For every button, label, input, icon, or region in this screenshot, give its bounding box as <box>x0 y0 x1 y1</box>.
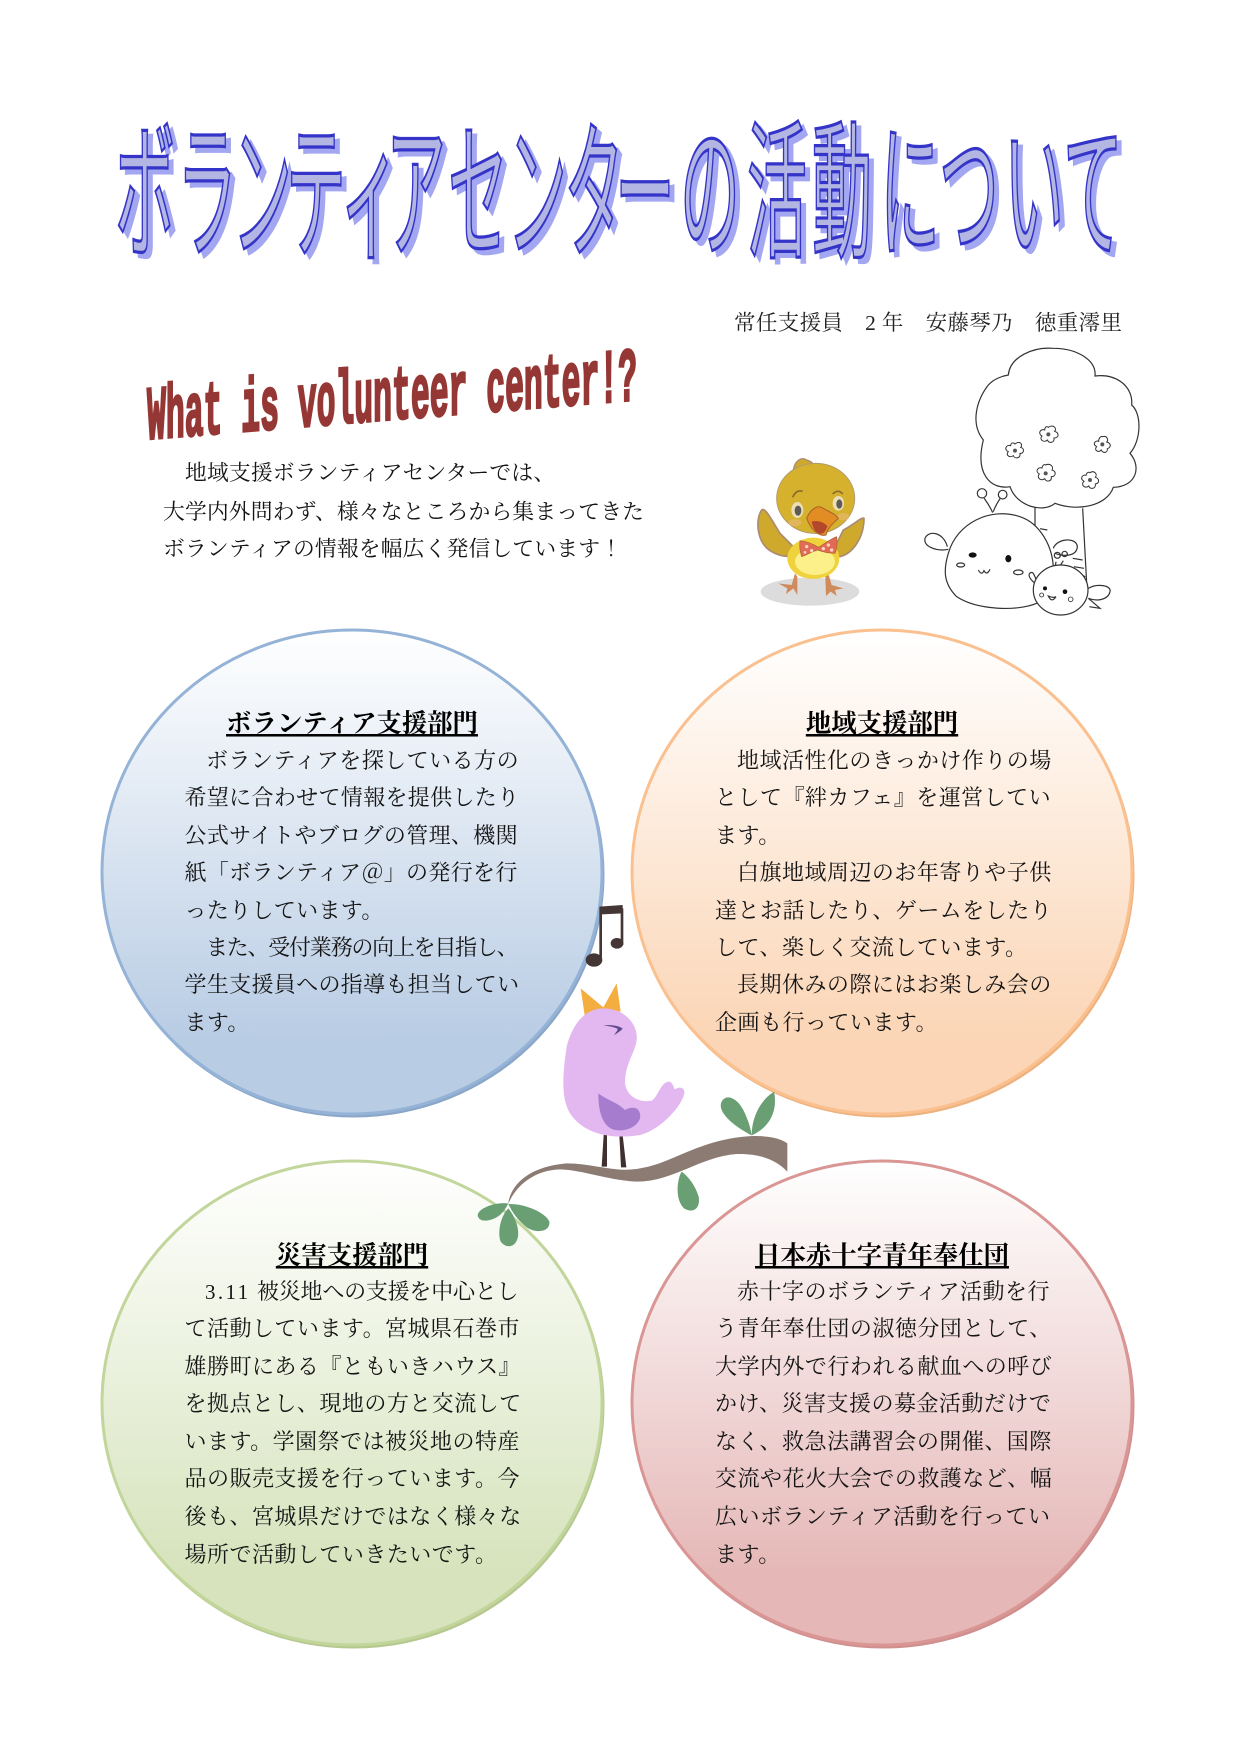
text: volunteer support body: ます。 <box>184 1010 250 1035</box>
text: volunteer support body <box>184 748 519 1035</box>
title: ボランティアセンターの活動について <box>115 112 1123 279</box>
text: red cross youth body: 広いボランティア活動を行ってい <box>715 1504 1050 1529</box>
panel: disaster support <box>102 1161 604 1648</box>
text: volunteer support body: ったりしています。 <box>184 898 384 923</box>
text: community support body: 達とお話したり、ゲームをしたり <box>715 898 1052 923</box>
text: volunteer support body: また、受付業務の向上を目指し、 <box>206 935 519 960</box>
text: community support body: 長期休みの際にはお楽しみ会の <box>737 972 1052 997</box>
text: disaster support body: います。学園祭では被災地の特産 <box>184 1429 520 1454</box>
text: red cross youth body: 交流や花火大会での救護など、幅 <box>715 1466 1052 1491</box>
icon: music note <box>586 905 623 967</box>
text: volunteer support body: 公式サイトやブログの管理、機関 <box>184 823 518 848</box>
text: disaster support body: 品の販売支援を行っています。今 <box>184 1466 520 1491</box>
text: disaster support body: 3.11 <box>205 1280 251 1304</box>
text: red cross youth body: う青年奉仕団の淑徳分団として、 <box>715 1316 1052 1341</box>
text: volunteer support body: 希望に合わせて情報を提供したり <box>184 785 519 810</box>
panel: community support <box>632 630 1134 1118</box>
text: community support body: として『絆カフェ』を運営してい <box>715 785 1051 810</box>
icon: bird eye <box>603 1025 623 1035</box>
intro text: 地域支援ボランティアセンターでは、 <box>185 461 555 485</box>
heading: red cross youth: 日本赤十字青年奉仕団 <box>755 1241 1009 1270</box>
text: community support body: 企画も行っています。 <box>715 1010 938 1035</box>
text: volunteer support body: 紙「ボランティア＠」の発行を行 <box>184 860 518 885</box>
text: community support body: ます。 <box>715 823 781 848</box>
icon: leaves <box>478 1092 775 1246</box>
text: red cross youth body: かけ、災害支援の募金活動だけで <box>715 1391 1051 1416</box>
text: disaster support body: て活動しています。宮城県石巻市 <box>184 1316 520 1341</box>
icon: bird beak <box>581 983 621 1017</box>
icon: bird wing <box>598 1093 640 1130</box>
text: volunteer support body: 学生支援員への指導も担当してい <box>184 972 519 997</box>
text: disaster support body: 後も、宮城県だけではなく様々な <box>184 1504 522 1529</box>
heading: community support: 地域支援部門 <box>806 709 958 738</box>
text: red cross youth body: 赤十字のボランティア活動を行 <box>737 1279 1050 1304</box>
heading: disaster support: 災害支援部門 <box>276 1241 428 1270</box>
text: red cross youth body: 大学内外で行われる献血への呼び <box>715 1354 1052 1379</box>
icon: yellow chick <box>758 459 864 606</box>
text: red cross youth body: ます。 <box>715 1542 781 1567</box>
icon: singing bird on branch <box>478 905 787 1246</box>
text: red cross youth body <box>715 1279 1052 1567</box>
icon: blossoms <box>1006 426 1110 488</box>
text: disaster support body: 雄勝町にある『ともいきハウス』 <box>184 1354 521 1379</box>
panel: volunteer support <box>102 630 604 1118</box>
text: community support body: 白旗地域周辺のお年寄りや子供 <box>737 860 1052 885</box>
intro text: 大学内外問わず、様々なところから集まってきた <box>163 500 644 524</box>
intro text <box>163 461 644 561</box>
heading: volunteer support: ボランティア支援部門 <box>226 709 478 738</box>
intro text: ボランティアの情報を幅広く発信しています！ <box>163 537 622 561</box>
text: disaster support body <box>184 1279 522 1567</box>
text: red cross youth body: なく、救急法講習会の開催、国際 <box>715 1429 1052 1454</box>
text: community support body: 地域活性化のきっかけ作りの場 <box>737 748 1052 773</box>
author line: 常任支援員 2 年 安藤琴乃 徳重澪里 <box>734 311 1122 335</box>
text: disaster support body: 場所で活動していきたいです。 <box>184 1542 497 1567</box>
subtitle: what is volunteer center: What is volunteer center!? <box>147 336 637 462</box>
icon: tree with round characters <box>925 348 1139 615</box>
icon: bird body <box>563 1008 684 1137</box>
text: community support body <box>715 748 1052 1035</box>
text: volunteer support body: ボランティアを探している方の <box>206 748 519 773</box>
icon: branch <box>508 1136 787 1204</box>
text: community support body: して、楽しく交流しています。 <box>715 935 1028 960</box>
text: disaster support body: 被災地への支援を中心とし <box>257 1279 519 1304</box>
text: disaster support body: を拠点とし、現地の方と交流して <box>184 1391 522 1416</box>
panel: red cross youth <box>632 1161 1134 1648</box>
icon: bird legs <box>602 1135 626 1167</box>
